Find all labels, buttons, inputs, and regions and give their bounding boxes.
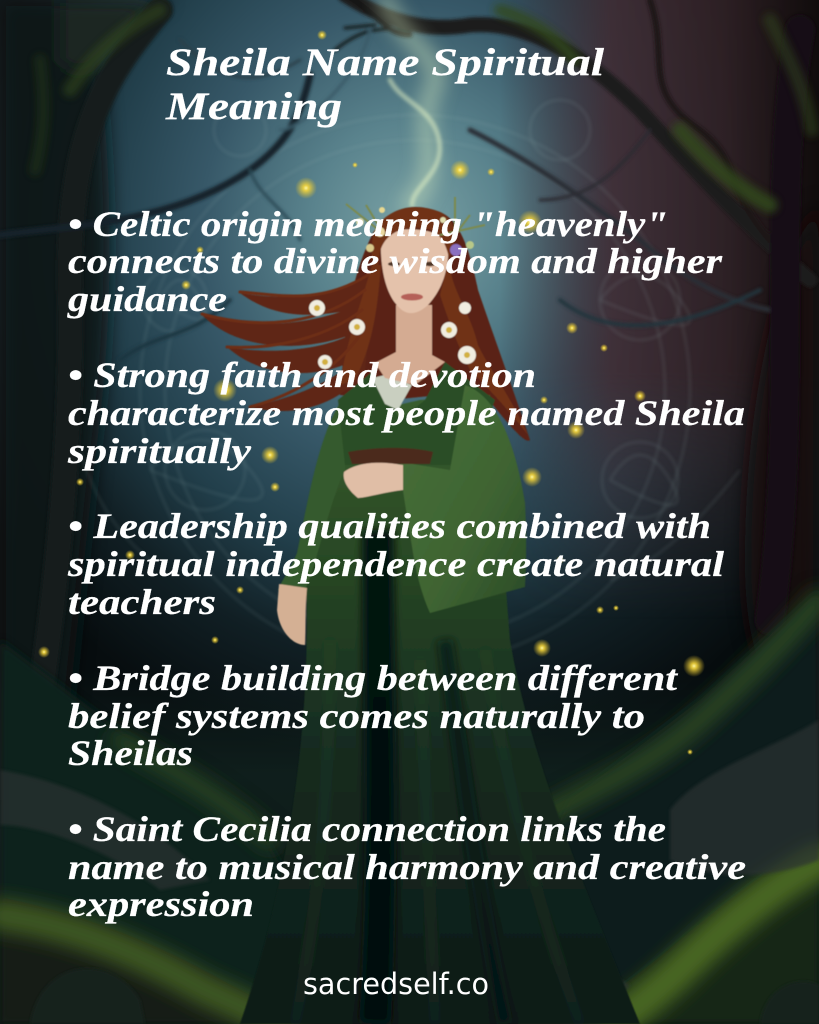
belt [348, 448, 433, 464]
bullet: leadership: • Leadership qualities combined with [68, 506, 711, 546]
dark side trees [0, 0, 819, 800]
rocks and roots [0, 720, 819, 1024]
website footer: sacredself.co [303, 967, 489, 1001]
bullet: faith and devotion: spiritually [67, 431, 252, 471]
lips and eyes [388, 262, 436, 300]
moss ridges [0, 600, 819, 1024]
bullet: Celtic origin: • Celtic origin meaning "heavenly" [68, 204, 668, 244]
hair flowers [309, 300, 476, 369]
bullet: faith and devotion [67, 355, 745, 471]
tree trunks and branches [0, 0, 810, 700]
hair top and side locks [340, 207, 528, 435]
bullet: Celtic origin [67, 204, 723, 319]
hair behind [200, 207, 530, 441]
dress folds [295, 640, 580, 1024]
dress skirt [240, 395, 640, 1024]
bullet: Celtic origin: connects to divine wisdom and higher [68, 241, 723, 281]
bullet: Saint Cecilia: expression [68, 884, 254, 924]
flying hair strands [202, 275, 368, 407]
celtic knot circle carvings [80, 100, 740, 665]
figure: woman in green dress [200, 197, 640, 1024]
bullet: Saint Cecilia [68, 809, 746, 924]
title: Sheila Name Spiritual [166, 41, 604, 84]
fireflies [38, 30, 705, 755]
flower crown [346, 197, 485, 256]
bullet: Celtic origin: guidance [67, 279, 227, 319]
bullet: leadership: teachers [68, 582, 216, 622]
title: Meaning [165, 85, 342, 128]
bullet: bridge building: belief systems comes naturally to [68, 696, 645, 736]
mossy ground slopes [0, 590, 819, 1024]
bullet: Saint Cecilia: name to musical harmony and creative [68, 847, 746, 887]
bullet: Saint Cecilia: • Saint Cecilia connection links the [68, 809, 666, 849]
bullet: faith and devotion: characterize most people named Sheila [68, 393, 745, 433]
mist swirl [385, 0, 436, 205]
face [381, 229, 448, 313]
bullet: faith and devotion: • Strong faith and devotion [68, 355, 536, 395]
bullet: leadership: spiritual independence create natural [67, 544, 724, 584]
bullet: bridge building: • Bridge building between different [68, 658, 678, 698]
bullet: leadership [67, 506, 724, 622]
left sleeve and arm [278, 395, 345, 590]
right sleeve [400, 385, 526, 613]
dark center fold [375, 530, 380, 1024]
bodice [338, 362, 495, 465]
neck [375, 305, 445, 385]
hand left [277, 584, 307, 645]
moss on branches [35, 10, 812, 205]
arm across waist [344, 463, 403, 498]
chemise [372, 375, 412, 410]
bullet: bridge building: Sheilas [68, 733, 193, 773]
title [165, 41, 604, 128]
bullet: bridge building [68, 658, 678, 773]
